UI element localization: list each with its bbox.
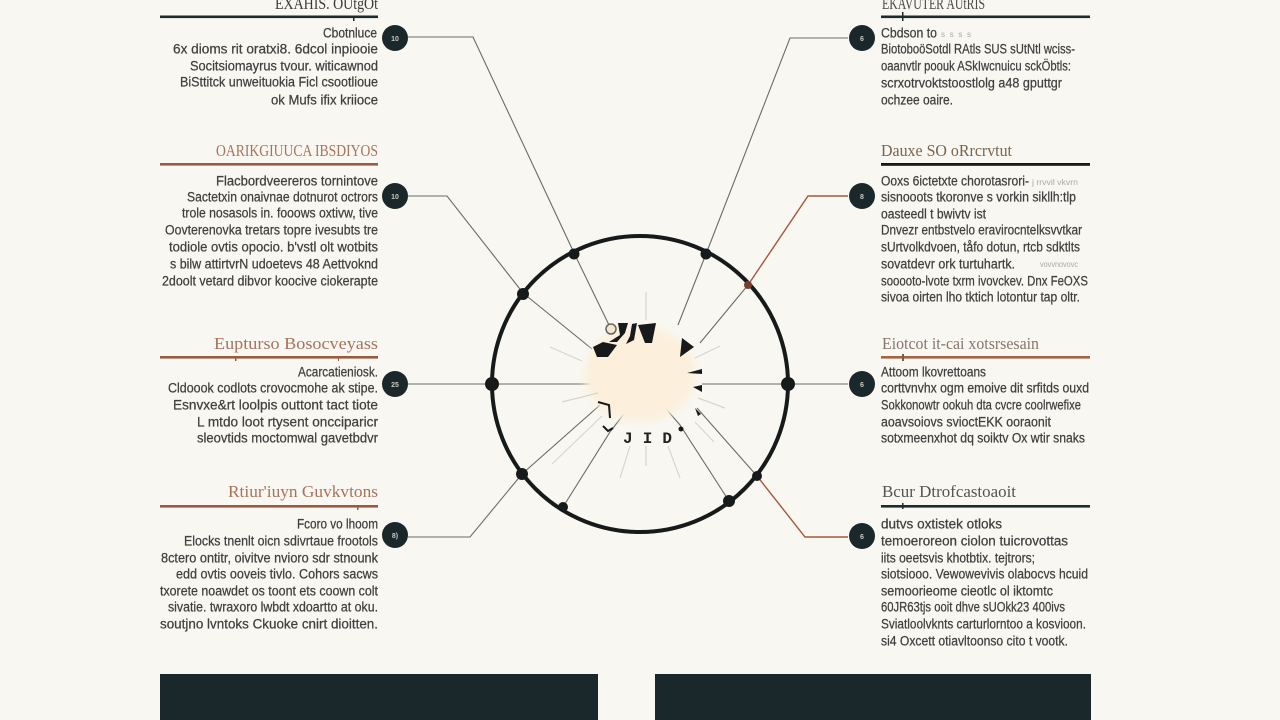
text block: right 4: Sviatloolvknts carturlorntoo a kosvioon. (881, 616, 1086, 632)
text block: left 1: Cbotnluce (323, 26, 377, 40)
text block: right 3: aoavsoiovs svioctEKK ooraonit (881, 414, 1051, 430)
text block: left 2: trole nosasols in. fooows oxtivw, tive (182, 206, 378, 220)
text block: right 2: Dnvezr entbstvelo eravirocntelksvvtkar (881, 222, 1082, 238)
text block: left 3: L mtdo loot rtysent oncciparicr (197, 414, 379, 430)
text block: right 2: Ooxs 6ictetxte chorotasrori- (881, 174, 1029, 188)
heading: right 2: Dauxe SO oRrcrvtut (881, 141, 1012, 160)
text block: left 1: 6x dioms rit oratxi8. 6dcol inpiooie (173, 42, 378, 56)
icon: right badge 4: 6 (860, 534, 864, 541)
text block: right 2: sisnooots tkoronve s vorkin sikllh:tlp (881, 190, 1076, 204)
heading: left 3: Eupturso Bosocveyass (214, 334, 378, 353)
text block: right 4: temoeroreon ciolon tuicrovottas (881, 534, 1068, 548)
icon: right badge 3 (849, 371, 875, 397)
icon: right badge 1: 6 (860, 36, 864, 43)
icon: left badge 3 (382, 371, 408, 397)
text block: right 2: sUrtvolkdvoen, tåfo dotun, rtcb sdktlts (881, 240, 1080, 254)
heading: left 4: Rtiur'iuyn Guvkvtons (228, 482, 378, 501)
panel: left 2 (160, 141, 378, 288)
panel: right 3 (881, 334, 1090, 446)
text block: right 1: Cbdson to (881, 26, 937, 40)
icon: left badge 4 (382, 522, 408, 548)
text block: right 3: Attoom lkovrettoans (881, 364, 986, 380)
text block: right 1: ochzee oaire. (881, 92, 953, 108)
text block: right 2: oasteedl t bwivtv ist (881, 206, 986, 222)
icon: right badge 3: 6 (860, 382, 864, 389)
text block: left 4: txorete noawdet os toont ets coown colt (160, 584, 378, 598)
panel: left 3 (160, 334, 379, 446)
text block: left 4: soutjno lvntoks Ckuoke cnirt dioitten. (160, 616, 378, 632)
central ring with nodes (485, 236, 795, 532)
text block: left 3: Acarcatieniosk. (298, 364, 378, 380)
text block: right 2: sooooto-lvote txrm ivovckev. Dnx FeOXS (881, 274, 1088, 288)
text block: left 4: Elocks tnenlt oicn sdivrtaue frootols (184, 534, 378, 548)
panel: right 4 (881, 482, 1090, 648)
text block: right 2: sovatdevr ork turtuhartk. (881, 256, 1015, 272)
text block: right 4: semoorieome cieotlc ol iktomtc (881, 584, 1053, 598)
text block: right 3: corttvnvhx ogm emoive dit srfitds ouxd (881, 380, 1089, 396)
panel: right 2 (881, 141, 1090, 304)
panel: left 1 (160, 0, 378, 108)
text block: right 2: vovvnovovc (1040, 260, 1078, 269)
text block: left 2 (162, 174, 378, 288)
text block: right 4: dutvs oxtistek otloks (881, 516, 1002, 532)
text block: left 2: Oovterenovka tretars topre ivesubts tre (165, 222, 378, 238)
text block: left 2: Sactetxin onaivnae dotnurot octrors (187, 190, 378, 204)
heading: right 3: Eiotcot it-cai xotsrsesain (882, 334, 1039, 353)
text block: left 4 (160, 516, 378, 632)
text block: right 4: si4 Oxcett otiavltoonso cito t vootk. (881, 634, 1068, 648)
icon: left badge 4: 8) (392, 533, 398, 540)
icon: right badge 4 (849, 523, 875, 549)
text block: left 4: sivatie. twraxoro lwbdt xdoartto at oku. (168, 600, 378, 614)
icon: left badge 2: 10 (391, 194, 399, 201)
icon: right badge 1 (849, 25, 875, 51)
text block: right 1: s s s s (941, 30, 971, 39)
text block: left 3 (168, 364, 379, 446)
text block: left 2: 2doolt vetard dibvor koocive ciokerapte (162, 274, 378, 288)
central burst icon (550, 292, 725, 478)
heading: right 4: Bcur Dtrofcastoaoit (882, 482, 1016, 501)
text block: right 2: j rrvvil vkvrn (1031, 178, 1078, 187)
text block: left 2: s bilw attirtvrN udoetevs 48 Aettvoknd (170, 256, 378, 272)
text block: left 4: edd ovtis ooveis tivlo. Cohors sacws (176, 566, 378, 582)
text block: left 3: Cldoook codlots crovocmohe ak stipe. (168, 380, 378, 396)
text block: left 1: BiSttitck unweituokia Ficl csootlioue (180, 74, 378, 90)
icon: left badge 2 (382, 183, 408, 209)
text block: left 1: Socitsiomayrus tvour. witicawnod (190, 58, 378, 74)
icon: left badge 3: 25 (391, 382, 399, 389)
text block: left 4: 8ctero ontitr, oivitve nvioro sdr stnounk (161, 550, 378, 566)
text block: right 4: 60JR63tjs ooit dhve sUOkk23 400ivs (881, 600, 1065, 614)
text block: left 1 (173, 26, 378, 108)
text block: right 3: Sokkonowtr ookuh dta cvcre coolrwefixe (881, 398, 1081, 412)
text block: left 3: Esnvxe&rt loolpis outtont tact tiote (173, 398, 378, 412)
text block: right 1: oaanvtlr poouk ASkIwcnuicu sckÖbtls: (881, 58, 1071, 74)
heading: left 2: OARIKGIUUCA IBSDIYOS (216, 141, 378, 160)
text block: right 4: iits oeetsvis khotbtix. tejtrors; (881, 550, 1035, 566)
panel: bottom left dark bar (160, 674, 598, 720)
panel: bottom right dark bar (655, 674, 1091, 720)
icon: left badge 1 (382, 25, 408, 51)
text block: left 4: Fcoro vo lhoom (297, 516, 378, 532)
text block: right 2 (881, 174, 1088, 304)
text block: right 1: BiotoboöSotdl RAtls SUS sUtNtl wciss- (881, 42, 1075, 56)
icon: right badge 2: 8 (860, 194, 864, 201)
text block: left 2: todiole ovtis opocio. b'vstl olt wotbits (169, 240, 378, 254)
text block: right 2: sivoa oirten lho tktich lotontur tap oltr. (881, 290, 1080, 304)
text block: right 4 (881, 516, 1088, 648)
text block: right 1 (881, 26, 1075, 108)
text block: right 3: sotxmeenxhot dq soiktv Ox wtir snaks (881, 430, 1085, 446)
panel: right 1 (881, 0, 1090, 108)
text block: right 4: siotsiooo. Vewowevivis olabocvs hcuid (881, 566, 1088, 582)
text block: right 3 (881, 364, 1089, 446)
text block: left 1: ok Mufs ifix kriioce (271, 92, 378, 108)
text block: left 2: Flacbordveereros tornintove (216, 174, 378, 188)
icon: left badge 1: 10 (391, 36, 399, 43)
connector lines (408, 37, 848, 537)
icon: right badge 2 (849, 183, 875, 209)
center small text: JID (623, 430, 672, 448)
text block: left 3: sleovtids moctomwal gavetbdvr (197, 430, 378, 446)
panel: left 4 (160, 482, 378, 632)
text block: right 1: scrxotrvoktstoostlolg a48 gputtgr (881, 76, 1062, 90)
